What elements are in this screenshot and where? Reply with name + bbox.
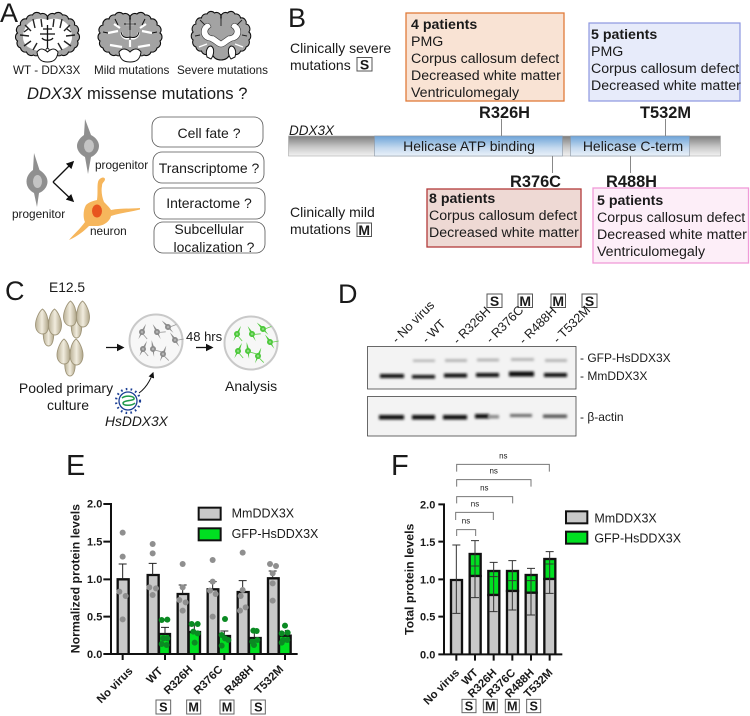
y axis ticks: 2.0 bbox=[420, 499, 435, 511]
lane labels: - R326H bbox=[450, 304, 493, 347]
box: R376C patients: Decreased white matter bbox=[429, 225, 579, 241]
panel E: normalized protein levels chart bbox=[68, 499, 319, 714]
cell labels: progenitor bbox=[95, 158, 148, 172]
box: T532M patients: PMG bbox=[591, 44, 623, 60]
cell labels: progenitor bbox=[12, 207, 65, 221]
x axis labels: R326H bbox=[162, 664, 195, 697]
x axis labels: R376C bbox=[192, 664, 225, 697]
panel letter B: B bbox=[288, 3, 306, 33]
mutation position lines bbox=[502, 119, 666, 173]
severity badges: M bbox=[519, 293, 531, 309]
lane labels: - WT bbox=[419, 317, 449, 346]
stacked bars: green bbox=[470, 554, 555, 595]
box: T532M patients: Corpus callosum defect bbox=[591, 61, 739, 77]
significance brackets: ns bbox=[462, 516, 470, 525]
severity badges: S bbox=[159, 700, 168, 714]
box: R488H patients: 5 patients bbox=[597, 193, 663, 209]
panel letter C: C bbox=[5, 276, 24, 306]
box: transcriptome bbox=[153, 152, 264, 183]
HsDDX3X label: HsDDX3X bbox=[105, 414, 169, 429]
x axis labels: R488H bbox=[503, 667, 537, 700]
blot band labels: - GFP-HsDDX3X bbox=[580, 351, 671, 365]
lane labels: - R488H bbox=[516, 304, 559, 347]
box: R488H patients: Ventriculomegaly bbox=[597, 244, 706, 260]
y axis ticks: 1.5 bbox=[420, 537, 435, 549]
stacked bars: grey bbox=[451, 576, 555, 654]
panel B: DDX3X protein map bbox=[288, 3, 748, 263]
x axis labels: T532M bbox=[253, 664, 286, 697]
blot band labels bbox=[580, 351, 671, 424]
blot band labels: - MmDDX3X bbox=[580, 369, 647, 383]
y axis title: Normalized protein levels bbox=[68, 504, 82, 653]
severity badges: S bbox=[465, 699, 473, 713]
box: interactome bbox=[154, 188, 265, 219]
petri dish with grey neurons bbox=[130, 314, 186, 368]
legend bbox=[199, 506, 319, 541]
box: R376C patients: 8 patients bbox=[429, 191, 495, 207]
box: R376C patients bbox=[427, 189, 581, 247]
box: T532M patients bbox=[589, 23, 741, 101]
panel A: questions about DDX3X mutations bbox=[0, 0, 268, 255]
box: R376C patients: Corpus callosum defect bbox=[429, 208, 577, 224]
panel letter F: F bbox=[391, 450, 409, 482]
culture label bbox=[19, 380, 113, 413]
y axis ticks bbox=[87, 499, 102, 661]
legend: GFP-HsDDX3X bbox=[232, 527, 319, 541]
severity badges: S bbox=[490, 293, 499, 309]
box: R488H patients: Corpus callosum defect bbox=[597, 210, 745, 226]
x axis labels: R488H bbox=[223, 664, 256, 697]
label E12.5: E12.5 bbox=[49, 280, 85, 295]
y axis ticks: 1.0 bbox=[87, 574, 102, 586]
box: subcellular localization: Subcellular bbox=[174, 221, 244, 237]
blot: GFP-HsDDX3X and MmDDX3X bbox=[368, 346, 576, 389]
significance brackets bbox=[456, 451, 549, 536]
blot: beta-actin bbox=[368, 396, 576, 436]
y axis ticks: 0.5 bbox=[87, 611, 102, 623]
culture label: Pooled primary bbox=[19, 380, 113, 396]
significance brackets: ns bbox=[489, 467, 498, 476]
Analysis label: Analysis bbox=[225, 378, 277, 394]
x axis labels: No virus bbox=[422, 667, 462, 708]
box: R326H patients: PMG bbox=[411, 34, 443, 50]
panel F: total protein levels chart bbox=[402, 451, 682, 713]
box: interactome: Interactome ? bbox=[166, 195, 252, 211]
significance brackets: ns bbox=[499, 451, 508, 460]
cell labels: neuron bbox=[90, 224, 127, 238]
box: subcellular localization: localization ? bbox=[174, 239, 255, 255]
y axis ticks: 2.0 bbox=[87, 499, 102, 511]
cell labels bbox=[12, 158, 148, 238]
lane labels: - T532M bbox=[550, 303, 593, 346]
label: clinically mild mutations: Clinically mild bbox=[290, 204, 375, 220]
x axis labels: No virus bbox=[95, 665, 135, 706]
label: clinically severe mutations: S bbox=[360, 56, 369, 72]
label: clinically severe mutations: Clinically severe bbox=[290, 40, 391, 56]
arrow to dish bbox=[106, 346, 123, 348]
box: R488H patients: Decreased white matter bbox=[597, 227, 747, 243]
legend bbox=[566, 511, 682, 546]
petri dish with green neurons bbox=[224, 316, 281, 370]
y axis ticks: 0.0 bbox=[420, 649, 435, 661]
brain: WT bbox=[16, 12, 80, 62]
axes bbox=[103, 504, 298, 660]
y axis ticks: 0.5 bbox=[420, 612, 435, 624]
x axis labels: R376C bbox=[485, 667, 518, 700]
severity badges: M bbox=[507, 699, 518, 713]
box: R326H patients bbox=[406, 13, 564, 101]
box: R326H patients: Corpus callosum defect bbox=[411, 51, 559, 67]
brain captions: Severe mutations bbox=[177, 64, 268, 77]
lane labels bbox=[389, 298, 593, 347]
mutation labels: T532M bbox=[640, 104, 691, 122]
protein bar with helicase domains: Helicase ATP binding bbox=[403, 138, 535, 154]
brain captions bbox=[13, 64, 268, 77]
protein bar with helicase domains bbox=[288, 136, 720, 156]
box: R488H patients bbox=[593, 188, 748, 263]
box: R326H patients: 4 patients bbox=[411, 17, 477, 33]
x axis labels: T532M bbox=[522, 667, 555, 700]
box: T532M patients: Decreased white matter bbox=[591, 78, 741, 94]
box: R326H patients: Decreased white matter bbox=[411, 68, 561, 84]
panel C: experimental workflow bbox=[5, 276, 281, 429]
brain: mild mutations bbox=[98, 12, 162, 62]
label: clinically mild mutations bbox=[290, 204, 375, 238]
box: R326H patients: Ventriculomegaly bbox=[411, 85, 520, 101]
legend: MmDDX3X bbox=[594, 511, 657, 525]
severity badges: M bbox=[188, 700, 199, 714]
data points: GFP-HsDDX3X bbox=[159, 616, 291, 649]
culture label: culture bbox=[47, 397, 89, 413]
mutation labels: R376C bbox=[510, 173, 561, 191]
heading: DDX3X missense mutations: DDX3X missense mutations ? bbox=[27, 84, 247, 103]
severity badges: S bbox=[254, 700, 263, 714]
label: clinically severe mutations bbox=[290, 40, 391, 73]
label: clinically severe mutations: mutations bbox=[290, 57, 351, 73]
box: T532M patients: 5 patients bbox=[591, 27, 657, 43]
y axis title: Total protein levels bbox=[402, 523, 416, 635]
lane labels: - R376C bbox=[483, 303, 526, 346]
box: cell fate bbox=[152, 117, 263, 147]
cell fate diagram bbox=[26, 119, 140, 240]
severity badges: M bbox=[222, 700, 232, 714]
gene label DDX3X: DDX3X bbox=[289, 123, 335, 138]
axes bbox=[438, 504, 562, 661]
curved arrow from virus to dish bbox=[139, 373, 153, 393]
error bars bbox=[452, 541, 554, 615]
severity badges: S bbox=[529, 699, 538, 713]
y axis ticks: 1.0 bbox=[420, 574, 435, 586]
severity badges bbox=[487, 293, 597, 309]
y axis ticks bbox=[420, 499, 435, 661]
48 hrs label: 48 hrs bbox=[186, 329, 223, 344]
x axis labels: R326H bbox=[466, 667, 499, 700]
error bars bbox=[119, 563, 285, 638]
mutation labels: R326H bbox=[479, 104, 530, 122]
significance brackets: ns bbox=[471, 500, 479, 509]
box: cell fate: Cell fate ? bbox=[177, 125, 241, 141]
virus icon bbox=[116, 389, 140, 413]
label: clinically mild mutations: M bbox=[358, 222, 370, 238]
lane labels: - No virus bbox=[389, 298, 437, 346]
severity badges bbox=[156, 700, 265, 714]
brain captions: Mild mutations bbox=[94, 64, 170, 77]
data points: MmDDX3X bbox=[116, 530, 279, 622]
legend: MmDDX3X bbox=[232, 506, 295, 520]
x axis labels bbox=[95, 664, 286, 706]
y axis ticks: 0.0 bbox=[87, 649, 102, 661]
severity badges: M bbox=[552, 293, 564, 309]
severity badges: M bbox=[485, 699, 496, 713]
green bars bbox=[159, 632, 291, 654]
arrow to analysis bbox=[196, 346, 212, 348]
x axis labels: WT bbox=[145, 665, 166, 686]
brain: severe mutations bbox=[191, 11, 251, 60]
embryonic brains bbox=[36, 301, 90, 376]
protein bar with helicase domains: Helicase C-term bbox=[583, 138, 683, 154]
brain captions: WT - DDX3X bbox=[13, 64, 81, 77]
label: clinically mild mutations: mutations bbox=[290, 221, 351, 237]
significance brackets: ns bbox=[480, 483, 489, 492]
severity badges: S bbox=[585, 293, 594, 309]
box: subcellular localization bbox=[154, 221, 265, 255]
severity badges bbox=[462, 699, 541, 713]
panel D: western blot bbox=[338, 279, 671, 436]
x axis labels: WT bbox=[460, 667, 481, 688]
x axis labels bbox=[422, 667, 555, 708]
y axis ticks: 1.5 bbox=[87, 536, 102, 548]
mutation labels: R488H bbox=[606, 173, 657, 191]
blot band labels: - β-actin bbox=[580, 410, 624, 424]
mutation labels bbox=[479, 104, 691, 191]
panel letter E: E bbox=[66, 450, 85, 482]
box: transcriptome: Transcriptome ? bbox=[159, 160, 260, 176]
panel letter D: D bbox=[338, 279, 358, 309]
legend: GFP-HsDDX3X bbox=[594, 532, 682, 546]
grey bars bbox=[118, 575, 279, 654]
